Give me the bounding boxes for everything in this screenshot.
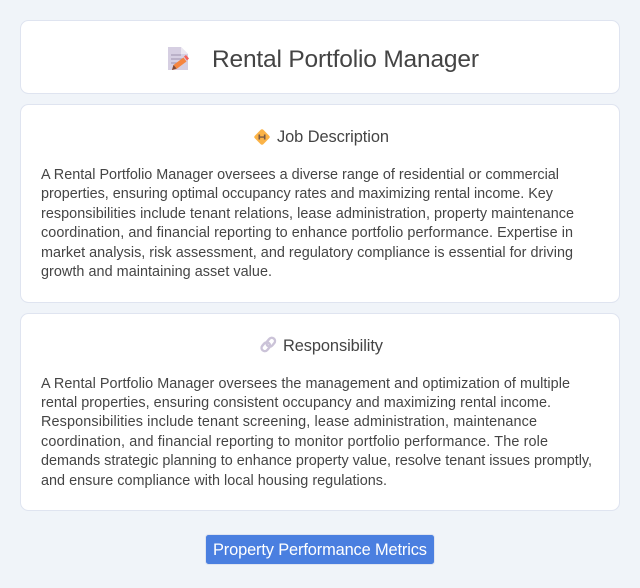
text block: job description: [41, 167, 574, 280]
text block: job description: properties, ensuring optimal occupancy rates and maximizing rental income. Key: [41, 186, 554, 202]
icon: diamond sign: [254, 129, 270, 145]
text block: responsibility: coordination, and financial reporting to monitor portfolio performance. The role: [41, 434, 548, 450]
icon: document with pencil: [168, 47, 189, 70]
panel: title: [20, 20, 620, 94]
text block: responsibility: [41, 376, 592, 489]
icon: chain link: [260, 336, 276, 352]
text block: job description: coordination, and financial reporting to enhance portfolio performance. Expertise in: [41, 225, 573, 241]
button: property performance metrics: Property Performance Metrics: [213, 541, 427, 559]
panel: responsibility: [20, 314, 620, 510]
text block: responsibility: A Rental Portfolio Manager oversees the management and optimization of multiple: [41, 376, 570, 392]
button: property performance metrics: [206, 534, 434, 564]
heading: responsibility: Responsibility: [283, 337, 384, 355]
panel: job description: [20, 104, 620, 302]
text block: responsibility: Responsibilities include tenant screening, lease administration, maintenance: [41, 414, 537, 430]
text block: job description: market analysis, risk assessment, and regulatory compliance is essential for driving: [41, 245, 573, 261]
text block: job description: growth and maintaining asset value.: [41, 264, 272, 280]
text block: responsibility: rental properties, ensuring consistent occupancy and maximizing rental income.: [41, 395, 551, 411]
text block: responsibility: demands strategic planning to enhance property value, resolve tenant issues promptly,: [41, 453, 592, 469]
heading: job description: Job Description: [277, 128, 389, 146]
text block: job description: responsibilities include tenant relations, lease administration, property maintenance: [41, 206, 574, 222]
text block: job description: A Rental Portfolio Manager oversees a diverse range of residential or commercial: [41, 167, 559, 183]
title text: Rental Portfolio Manager: [212, 46, 479, 73]
text block: responsibility: and ensure compliance with local housing regulations.: [41, 473, 387, 489]
